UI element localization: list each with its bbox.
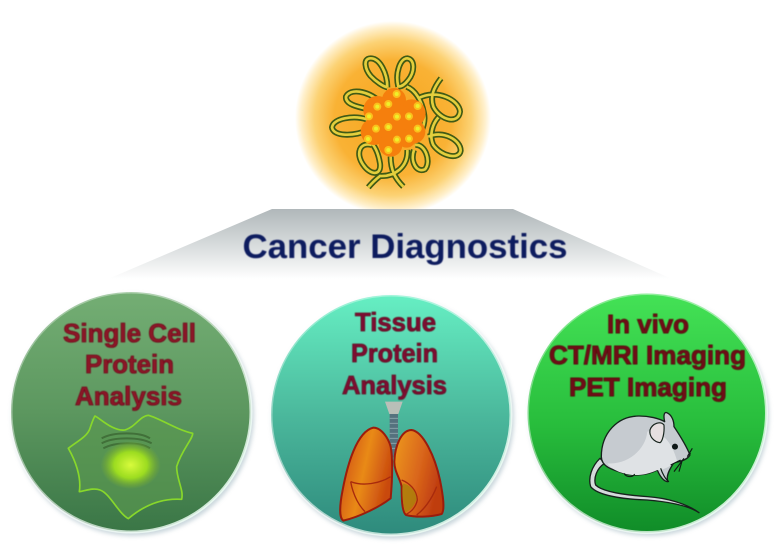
heading xyxy=(63,318,196,411)
polymer loops xyxy=(332,58,461,187)
icon: mouse xyxy=(590,413,699,513)
disc xyxy=(528,294,766,532)
icon: lungs xyxy=(340,402,443,521)
heading: Tissue xyxy=(355,307,436,337)
platform trapezoid xyxy=(108,209,672,279)
heading: CT/MRI Imaging xyxy=(549,340,746,370)
heading: Protein xyxy=(85,349,174,379)
panel: single cell protein analysis xyxy=(11,292,254,536)
icon: polymer nanoparticle xyxy=(332,58,461,187)
yellow dots xyxy=(365,91,421,153)
panel: tissue protein analysis xyxy=(271,295,514,539)
heading: Protein xyxy=(351,338,438,368)
heading xyxy=(549,309,746,402)
orange core xyxy=(361,88,426,157)
disc xyxy=(271,295,511,535)
heading: In vivo xyxy=(607,309,689,339)
background glow xyxy=(295,21,491,215)
panel: in vivo imaging xyxy=(528,294,769,536)
disc xyxy=(11,292,251,532)
heading: PET Imaging xyxy=(569,372,727,402)
icon: cell xyxy=(68,415,193,519)
heading: Analysis xyxy=(342,370,447,400)
heading: Single Cell xyxy=(63,318,196,348)
heading xyxy=(342,307,447,400)
title: Cancer Diagnostics xyxy=(242,228,568,266)
heading: Analysis xyxy=(75,381,182,411)
